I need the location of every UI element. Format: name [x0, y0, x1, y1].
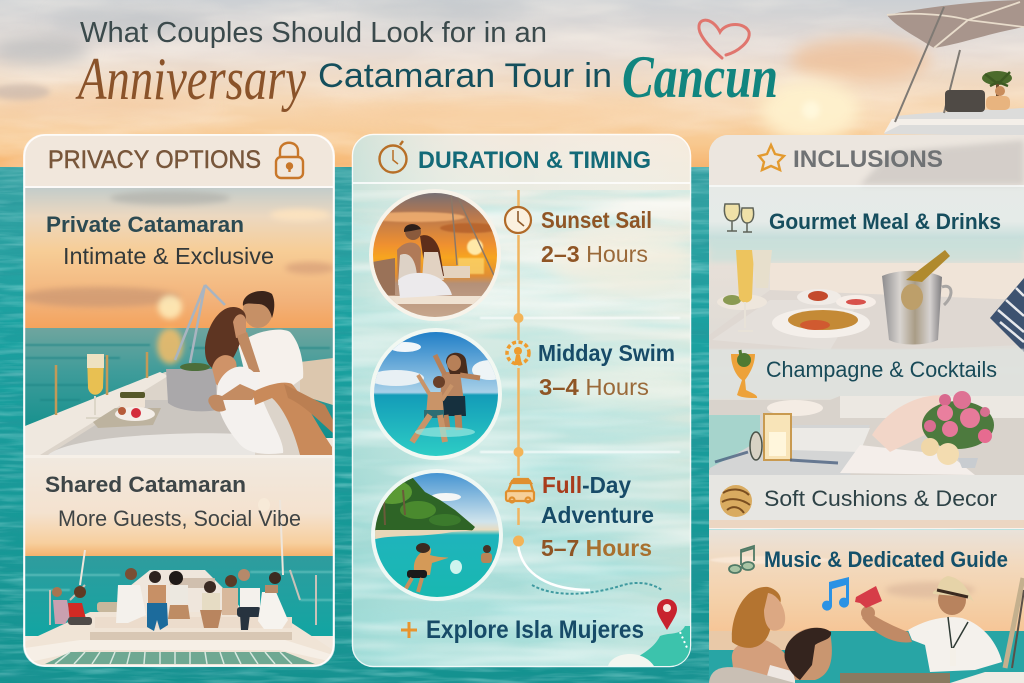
title line two: Catamaran Tour in	[318, 57, 612, 95]
text: shared catamaran: Shared Catamaran	[45, 472, 246, 497]
dessert plate	[93, 392, 161, 428]
guide	[861, 576, 1002, 672]
title line one: What Couples Should Look for in an	[80, 17, 547, 49]
man back of head	[785, 628, 832, 680]
icon: map pin	[657, 599, 677, 630]
island map	[608, 626, 692, 666]
text: adventure: Adventure	[541, 502, 654, 528]
scene: cushions and flowers	[709, 391, 1024, 475]
main plate	[772, 308, 870, 338]
pink pillow	[872, 395, 948, 452]
text: explore isla mujeres: Explore Isla Mujeres	[426, 616, 644, 644]
heading: inclusions: INCLUSIONS	[793, 146, 943, 173]
icon: plus	[401, 622, 417, 638]
scene: music and guide photo	[709, 530, 1024, 683]
icon: padlock	[276, 143, 303, 178]
photo: sunset sail	[365, 189, 501, 321]
text: soft cushions and decor: Soft Cushions & Decor	[764, 486, 997, 511]
text: full-day: Full-Day	[542, 472, 631, 498]
text: sunset sail: Sunset Sail	[541, 207, 652, 233]
panel: duration and timing	[352, 134, 720, 666]
heading: privacy options: PRIVACY OPTIONS	[48, 146, 261, 174]
icon: star	[759, 145, 784, 170]
champagne glass	[86, 354, 104, 418]
flower bouquet	[921, 391, 994, 468]
photo: midday swim	[368, 328, 508, 460]
text: champagne and cocktails: Champagne & Cocktails	[766, 357, 997, 382]
icon: vehicle	[506, 479, 534, 502]
icon: cushion swirl	[720, 485, 752, 517]
route dotted path	[532, 583, 662, 594]
text: midday swim: Midday Swim	[538, 340, 675, 366]
mast rigging	[175, 285, 225, 363]
text: more guests, social vibe: More Guests, Social Vibe	[58, 506, 301, 531]
icon: music notes outline	[729, 546, 754, 573]
panel: privacy options	[20, 134, 335, 666]
icon: wine glasses	[724, 204, 754, 232]
woman	[732, 587, 795, 683]
side plates	[797, 289, 841, 305]
scene: gourmet table	[717, 250, 1024, 352]
couple embracing	[205, 291, 333, 455]
photo: shared catamaran group	[25, 496, 333, 664]
lantern	[750, 414, 791, 460]
icon: red music note	[855, 586, 882, 608]
ice bucket	[882, 271, 942, 344]
text: 2-3 hours: 2–3 Hours	[541, 241, 648, 267]
lower band	[710, 348, 1024, 352]
icon: clock	[505, 207, 531, 233]
seated guests	[52, 568, 288, 631]
title script word Anniversary: Anniversary	[75, 46, 306, 112]
icon: sun badge	[507, 342, 529, 365]
photo: private catamaran couple at sunset	[20, 188, 335, 455]
text: 3-4 hours: 3–4 Hours	[539, 374, 649, 400]
cooler	[166, 369, 217, 411]
title	[75, 17, 778, 112]
champagne flute	[736, 250, 754, 302]
text: gourmet meal and drinks: Gourmet Meal & Drinks	[769, 209, 1001, 234]
text: intimate and exclusive: Intimate & Exclusive	[63, 243, 274, 269]
icon: heart	[699, 20, 749, 58]
text: private catamaran: Private Catamaran	[46, 212, 244, 237]
boat superstructure	[131, 570, 240, 612]
icon: blue music notes	[822, 577, 849, 611]
deck	[25, 372, 300, 455]
timeline	[513, 190, 590, 590]
icon: stopwatch	[380, 141, 406, 172]
heading: duration and timing: DURATION & TIMING	[418, 147, 651, 174]
photo: full-day adventure	[370, 469, 503, 601]
icon: cocktail	[731, 350, 757, 398]
title script word Cancun: Cancun	[622, 44, 778, 110]
striped pillow	[990, 278, 1024, 352]
panel: inclusions	[709, 135, 1024, 683]
text: music and dedicated guide: Music & Dedicated Guide	[764, 547, 1008, 572]
text: 5-7 hours: 5–7 Hours	[541, 535, 652, 561]
yacht with canopy at top right	[884, 0, 1024, 136]
